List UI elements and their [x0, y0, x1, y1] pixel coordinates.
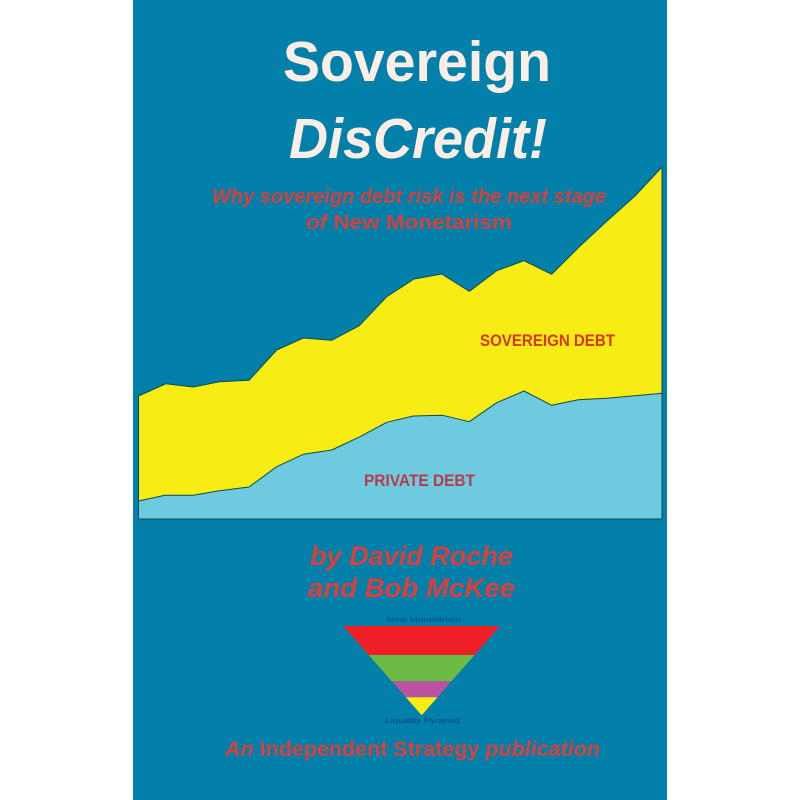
- band: yellow: [406, 697, 438, 715]
- subtitle: Why sovereign debt risk is the next stage: [212, 186, 606, 208]
- band: purple: [392, 681, 452, 697]
- band: red: [343, 626, 500, 655]
- authors: [308, 541, 515, 603]
- cover background panel: [133, 0, 667, 800]
- publisher line: An Independent Strategy publication: [224, 738, 600, 761]
- area: private debt: [138, 391, 662, 519]
- authors: and Bob McKee: [308, 573, 515, 603]
- label: sovereign debt: SOVEREIGN DEBT: [480, 331, 616, 350]
- band: green: [369, 655, 475, 681]
- inverted liquidity pyramid: [343, 615, 500, 725]
- label: private debt: PRIVATE DEBT: [364, 472, 475, 490]
- title: Sovereign: [283, 30, 551, 94]
- area: sovereign debt: [138, 167, 662, 519]
- title: [283, 30, 551, 171]
- area chart: debt: [138, 167, 662, 519]
- subtitle: of New Monetarism: [306, 212, 512, 234]
- title: DisCredit!: [289, 107, 547, 171]
- authors: by David Roche: [310, 541, 513, 571]
- label: liquidity pyramid: Liquidity Pyramid: [385, 716, 460, 725]
- label: new monetarism: New Monetarism: [387, 615, 461, 624]
- subtitle: [212, 186, 606, 234]
